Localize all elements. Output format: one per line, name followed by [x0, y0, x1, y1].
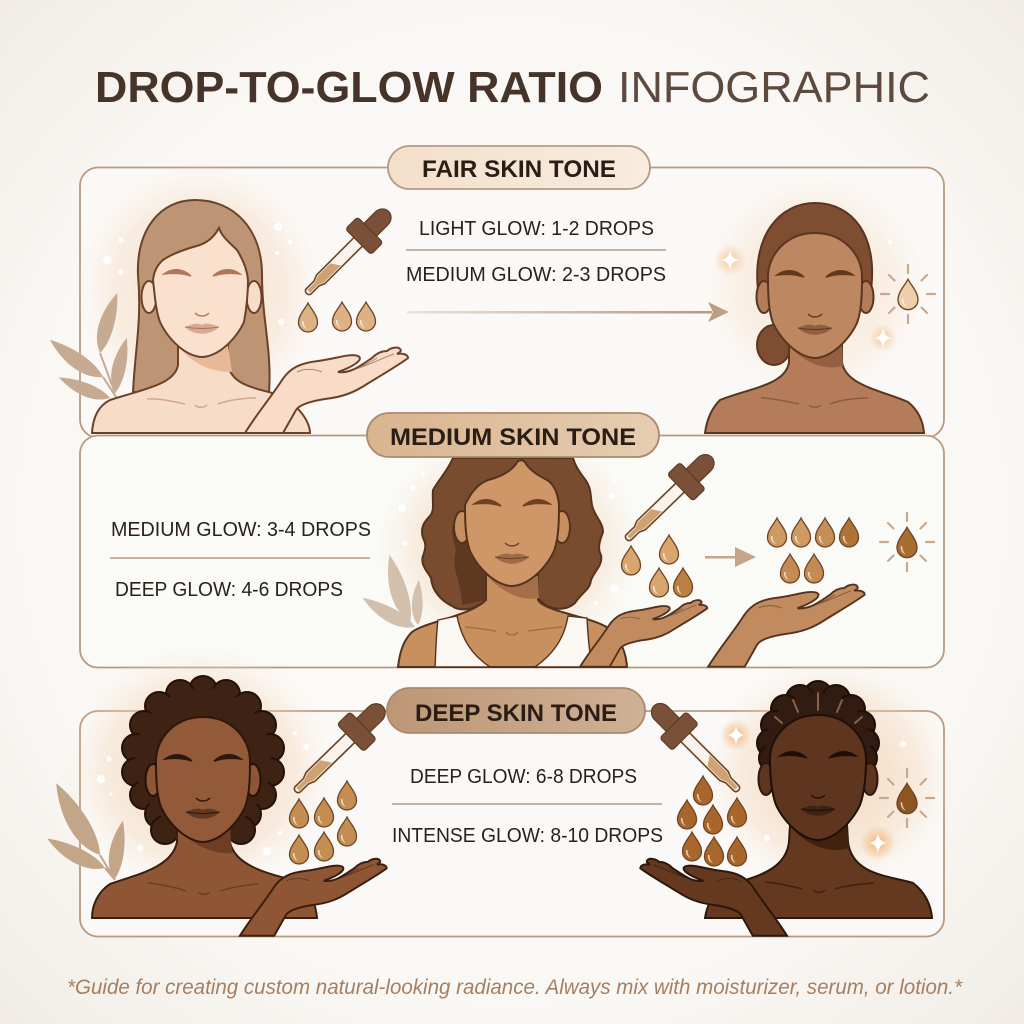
glow behind deep woman right	[705, 660, 955, 890]
pill: medium skin tone	[367, 413, 659, 457]
title	[95, 63, 930, 112]
dropper: deep left	[282, 693, 396, 805]
deep left hand	[240, 859, 387, 936]
deep woman right	[705, 681, 932, 918]
leaves: fair	[45, 291, 132, 405]
glow drop icon: fair	[881, 265, 935, 323]
dropper: fair	[294, 199, 401, 306]
leaves: deep	[43, 779, 128, 881]
drops: deep left	[290, 781, 356, 864]
text: deep glow amounts: INTENSE GLOW: 8-10 DROPS	[392, 825, 663, 847]
drops: fair	[298, 302, 376, 332]
glow drop icon: deep	[880, 769, 934, 827]
title: INFOGRAPHIC	[618, 63, 930, 112]
pill: medium skin tone: MEDIUM SKIN TONE	[390, 424, 636, 451]
text: medium glow amounts: MEDIUM GLOW: 3-4 DROPS	[111, 519, 371, 541]
glowing woman: fair result	[705, 203, 924, 433]
text: fair glow amounts	[406, 218, 666, 286]
text: fair glow amounts: MEDIUM GLOW: 2-3 DROPS	[406, 264, 666, 286]
arrow: medium	[705, 547, 756, 567]
sparkle stars: fair result	[714, 240, 897, 352]
glow behind medium woman	[375, 430, 645, 660]
medium hand small	[580, 600, 707, 667]
pill: deep skin tone	[387, 688, 645, 733]
panel: medium skin tone	[80, 430, 944, 668]
leaves: medium	[358, 553, 423, 635]
pill: fair skin tone	[388, 146, 650, 189]
text: medium glow amounts: DEEP GLOW: 4-6 DROPS	[115, 579, 343, 601]
arrow: fair	[407, 302, 729, 322]
panel: deep skin tone	[43, 645, 955, 936]
sparkles: deep left	[97, 731, 309, 855]
text: deep glow amounts: DEEP GLOW: 6-8 DROPS	[410, 766, 637, 788]
deep woman left	[92, 676, 317, 918]
pill: fair skin tone: FAIR SKIN TONE	[422, 156, 616, 183]
drops: medium result	[768, 518, 858, 583]
medium hand large	[708, 585, 865, 667]
text: medium glow amounts	[110, 519, 371, 601]
glow drop icon: medium	[880, 513, 934, 571]
glow behind deep woman left	[65, 645, 335, 895]
glow behind fair woman	[75, 160, 325, 420]
pill: deep skin tone: DEEP SKIN TONE	[415, 700, 617, 727]
fair hand	[245, 348, 408, 433]
sparkle stars: deep right	[720, 719, 906, 861]
text: deep glow amounts	[392, 766, 663, 847]
glow behind glowing woman	[700, 170, 930, 400]
sparkles: fair	[103, 223, 292, 325]
title: DROP-TO-GLOW RATIO	[95, 63, 603, 112]
deep right hand	[640, 859, 787, 936]
drops: deep right	[678, 776, 746, 866]
panel: fair skin tone	[45, 160, 944, 438]
medium woman	[398, 458, 627, 667]
dropper: medium	[614, 444, 724, 553]
text: fair glow amounts: LIGHT GLOW: 1-2 DROPS	[419, 218, 654, 240]
sparkles: medium	[398, 471, 618, 605]
fair woman	[92, 200, 310, 433]
drops: medium falling	[622, 535, 692, 597]
footnote: *Guide for creating custom natural-looking radiance. Always mix with moisturizer, serum, or lotion.*	[67, 976, 963, 999]
dropper: deep right	[641, 693, 752, 804]
